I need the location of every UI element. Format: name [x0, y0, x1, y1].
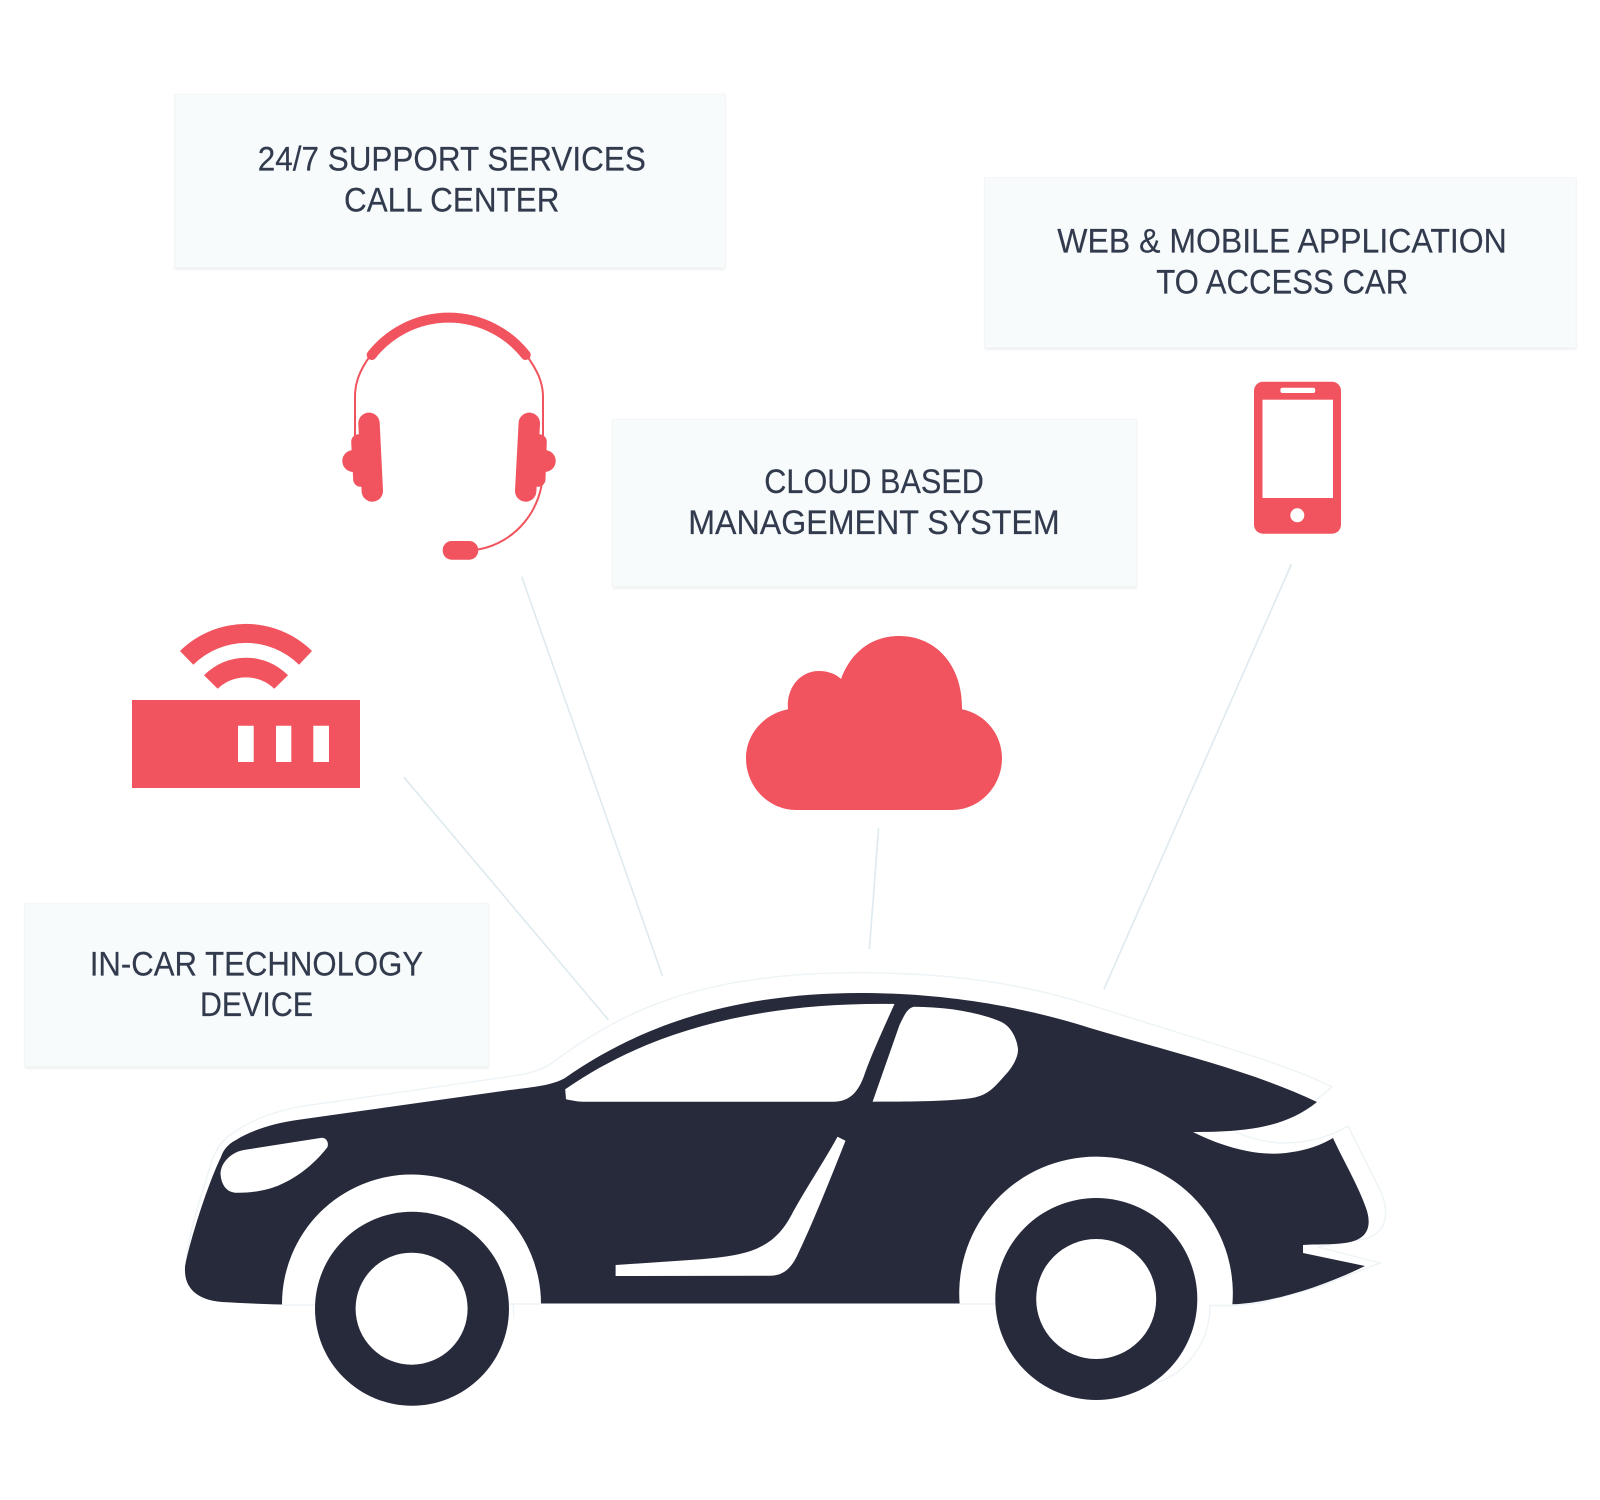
- panel: 24/7 support services: [175, 94, 725, 270]
- panel: 24/7 support services: CALL CENTER: [344, 181, 559, 219]
- panel: web and mobile application: [985, 178, 1576, 350]
- headlight: [220, 1138, 328, 1193]
- icon: headset: [342, 318, 556, 560]
- connector: router to car: [404, 777, 608, 1020]
- connector: headset to car: [522, 577, 662, 976]
- door handle line: [616, 1137, 846, 1276]
- panel: 24/7 support services: 24/7 SUPPORT SERVICES: [258, 141, 646, 179]
- rear wheel: [995, 1198, 1197, 1400]
- icon: wifi router: [132, 624, 360, 788]
- panel: cloud based management system: [613, 419, 1136, 588]
- car illustration: [185, 973, 1386, 1406]
- connector: cloud to car: [869, 828, 879, 949]
- panel: web and mobile application: TO ACCESS CAR: [1156, 263, 1408, 301]
- rear side window: [873, 1007, 1018, 1102]
- icon: smartphone: [1254, 382, 1341, 534]
- connector: phone to car: [1104, 564, 1292, 989]
- panel: in-car technology device: DEVICE: [200, 986, 313, 1024]
- front side window: [565, 1004, 894, 1102]
- icon: cloud: [746, 636, 1002, 810]
- panel: web and mobile application: WEB & MOBILE APPLICATION: [1057, 223, 1507, 261]
- front wheel: [315, 1212, 509, 1406]
- panel: cloud based management system: MANAGEMENT SYSTEM: [688, 504, 1060, 542]
- panel: in-car technology device: [25, 903, 489, 1068]
- panel: cloud based management system: CLOUD BASED: [764, 463, 984, 501]
- panel: in-car technology device: IN-CAR TECHNOLOGY: [90, 946, 423, 984]
- car body: [185, 993, 1369, 1304]
